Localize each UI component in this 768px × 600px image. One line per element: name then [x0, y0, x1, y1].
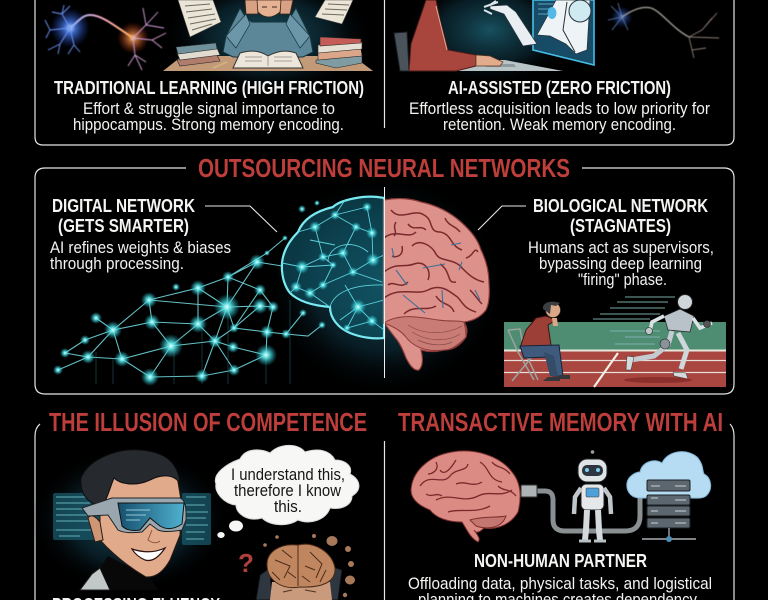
person in red: [409, 0, 476, 71]
chair: [394, 32, 409, 71]
paper right: [315, 0, 353, 24]
text: traditional learning: Effort & struggle signal importance to: [83, 100, 335, 118]
paper left: [178, 0, 221, 37]
text: AI-assisted: retention. Weak memory encoding.: [443, 116, 676, 134]
text: biological network: BIOLOGICAL NETWORK: [533, 195, 709, 216]
arrow: digital network callout: [205, 206, 277, 232]
seated man: [520, 316, 556, 352]
text: AI-assisted: AI-ASSISTED (ZERO FRICTION): [448, 77, 671, 98]
text: biological network: bypassing deep learning: [539, 255, 702, 273]
icon: digital brain half: [282, 197, 384, 338]
icon: cloud server: [627, 452, 711, 542]
text: AI-assisted: Effortless acquisition leads to low priority for: [409, 100, 710, 118]
icon: cable connector: [521, 485, 640, 531]
icon: robot: [574, 450, 611, 541]
callout: thought bubble: therefore I know: [234, 482, 341, 500]
illustration: crumbling brain head: ?: [238, 548, 254, 578]
floating data panels: [53, 493, 100, 540]
text: non-human partner: Offloading data, physical tasks, and logistical: [408, 575, 712, 593]
text: biological network: [528, 195, 714, 289]
text: digital network: AI refines weights & biases: [50, 239, 231, 257]
desk: [456, 60, 563, 71]
illustration: stressed student with books: [163, 0, 373, 95]
text: biological network: (STAGNATES): [570, 215, 671, 236]
sweater with raised arms: [223, 8, 313, 57]
text: digital network: DIGITAL NETWORK: [52, 195, 196, 216]
open book: [233, 51, 303, 68]
text: traditional learning: hippocampus. Strong memory encoding.: [73, 116, 344, 134]
icon: biological brain half: [384, 199, 489, 370]
illustration: crumbling brain head: [238, 534, 355, 600]
text: non-human partner: [408, 550, 712, 600]
illustration: human seated watching robot sprint on track: [504, 294, 726, 387]
text: traditional learning: TRADITIONAL LEARNING (HIGH FRICTION): [54, 77, 364, 98]
text: digital network: [50, 195, 231, 273]
robot arm: [490, 5, 537, 46]
hair: [81, 450, 180, 506]
illustration: man with VR goggles: [30, 448, 230, 592]
icon: faint neuron: [608, 3, 719, 58]
robot: [537, 0, 590, 54]
arrow: biological network callout: [478, 206, 526, 230]
right book stack: [316, 37, 362, 68]
callout: thought bubble: [215, 445, 359, 538]
head and hands: [256, 0, 282, 17]
callout: thought bubble: this.: [274, 498, 302, 516]
track: [504, 350, 726, 387]
goggles: [82, 498, 186, 533]
icon: bright firing neuron: [45, 5, 166, 70]
infield: [504, 322, 726, 350]
face: [100, 470, 181, 577]
panel: learning friction frame: [35, 0, 734, 145]
monitor: [533, 0, 594, 65]
speed lines: [593, 297, 675, 344]
debris: [263, 534, 355, 597]
callout: thought bubble: I understand this,: [231, 466, 345, 484]
text: non-human partner: NON-HUMAN PARTNER: [474, 550, 647, 571]
chart: digital neural network: [53, 200, 326, 386]
suit and collar: [80, 568, 110, 590]
text: AI-assisted: [409, 77, 710, 134]
desk: [163, 56, 373, 71]
folding chair: [508, 329, 538, 381]
pencil: [213, 62, 227, 68]
illustration: person typing with AI robot: [394, 0, 594, 85]
heading: outsourcing neural networks: OUTSOURCING NEURAL NETWORKS: [198, 155, 570, 183]
divider between brains: [384, 187, 386, 378]
text: biological network: "firing" phase.: [578, 271, 667, 289]
text: digital network: through processing.: [50, 255, 184, 273]
ear: [88, 516, 103, 542]
nose and smile: [148, 530, 160, 543]
heading: illusion of competence: THE ILLUSION OF COMPETENCE: [49, 409, 367, 437]
running robot: [678, 294, 692, 310]
text: digital network: (GETS SMARTER): [58, 215, 189, 236]
panel: outsourcing neural networks frame: [35, 168, 734, 394]
text: traditional learning: [54, 77, 364, 134]
left book stack: [176, 43, 220, 66]
background glow behind brains: [264, 175, 504, 395]
icon: brain connected to cable: [411, 451, 520, 542]
panel: bottom sections frame: [35, 424, 734, 600]
text: biological network: Humans act as supervisors,: [528, 239, 714, 257]
